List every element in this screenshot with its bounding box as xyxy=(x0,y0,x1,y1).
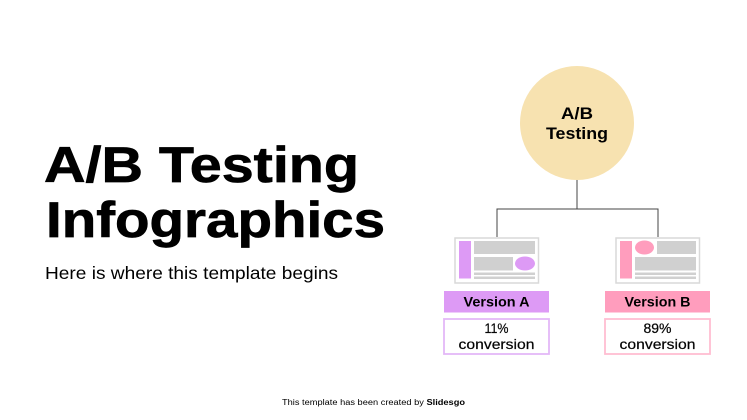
stat: 11% conversion: 11% xyxy=(484,320,508,336)
title: Infographics xyxy=(46,192,385,248)
tree connector lines xyxy=(497,180,658,237)
stat: 11% conversion: conversion xyxy=(458,336,534,352)
stat: 89% conversion: 89% xyxy=(644,320,672,336)
circle: A/B Testing: Testing xyxy=(546,124,608,143)
panel: version A xyxy=(444,238,549,354)
stat: 89% conversion xyxy=(605,319,710,354)
stat: 89% conversion: conversion xyxy=(620,336,696,352)
label: Version B: Version B xyxy=(624,294,691,310)
title xyxy=(44,137,385,248)
subtitle: Here is where this template begins xyxy=(45,263,338,283)
footer credit: This template has been created by Slidesgo xyxy=(282,398,465,407)
panel: version B xyxy=(605,238,710,354)
icon: version A page layout xyxy=(455,238,538,283)
label: Version A: Version A xyxy=(464,294,530,310)
stat: 11% conversion xyxy=(444,319,549,354)
circle: A/B Testing xyxy=(520,66,634,180)
icon: version B page layout xyxy=(616,238,700,283)
title: A/B Testing xyxy=(44,137,359,193)
circle: A/B Testing: A/B xyxy=(561,104,593,123)
